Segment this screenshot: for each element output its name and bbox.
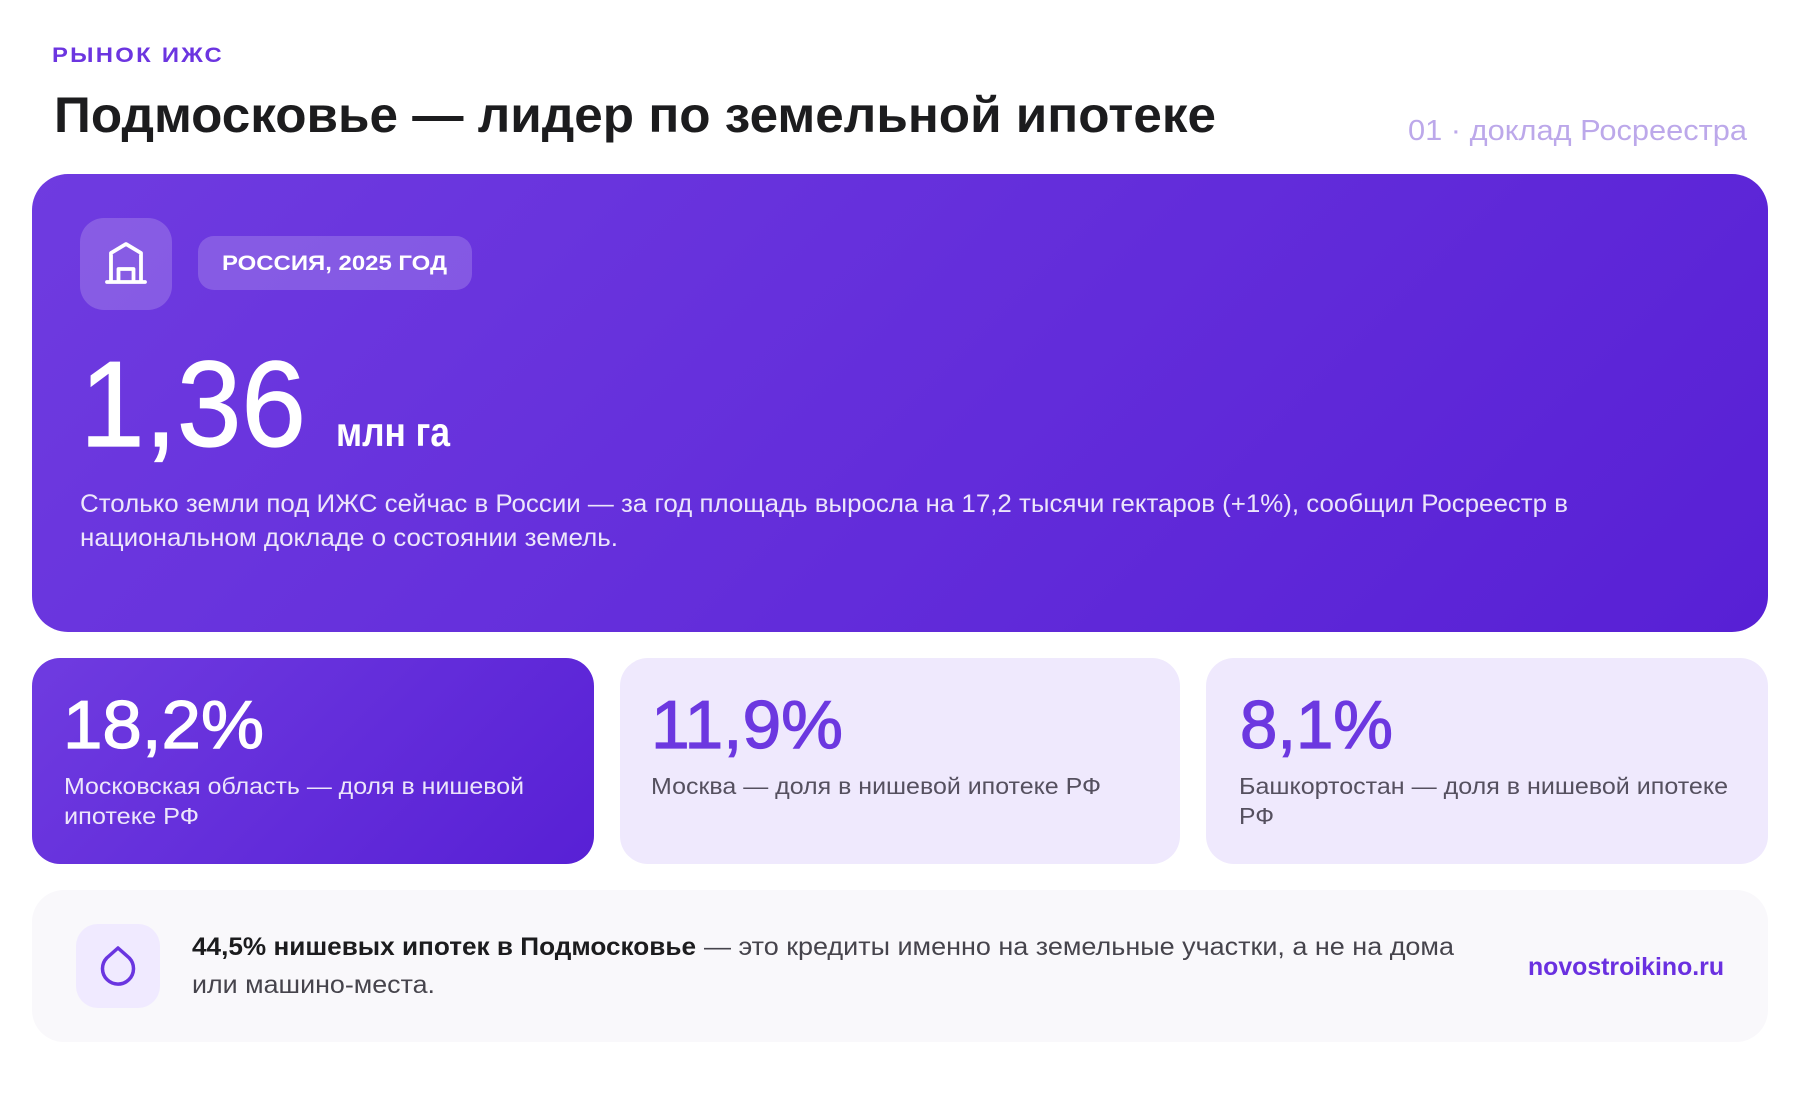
title: Подмосковье — лидер по земельной ипотеке — [54, 87, 1216, 143]
panel: bottom note — [32, 890, 1768, 1042]
description — [80, 490, 1568, 552]
panel: main stat hero — [32, 174, 1768, 632]
badge: Россия, 2025 год — [198, 236, 472, 290]
description: Столько земли под ИЖС сейчас в России — за год площадь выросла на 17,2 тысячи гектаров (+1%), сообщил Росреестр в — [80, 490, 1568, 518]
stat: 18,2%: 18,2% — [63, 687, 264, 763]
label — [64, 773, 524, 829]
note text: — это кредиты именно на земельные участки, а не на дома — [704, 933, 1454, 961]
page tag: 01 · доклад Росреестра — [1408, 115, 1748, 147]
label: РФ — [1239, 803, 1274, 829]
label — [1239, 773, 1728, 829]
panel: Москва — [620, 658, 1180, 864]
note text: 44,5% нишевых ипотек в Подмосковье — [192, 933, 696, 961]
panel: Башкортостан — [1206, 658, 1768, 864]
stat: 11,9%: 11,9% — [651, 687, 843, 763]
stat: 8,1%: 8,1% — [1240, 687, 1393, 763]
note text — [192, 933, 1454, 999]
icon: drop — [76, 924, 160, 1008]
label: Башкортостан — доля в нишевой ипотеке — [1239, 773, 1728, 799]
label: Москва — доля в нишевой ипотеке РФ — [651, 773, 1101, 799]
source link: novostroikino.ru — [1528, 953, 1724, 981]
label: ипотеке РФ — [64, 803, 199, 829]
big number: 1,36 — [80, 336, 306, 472]
eyebrow: рынок ИЖС: РЫНОК ИЖС — [52, 44, 224, 67]
label: Московская область — доля в нишевой — [64, 773, 524, 799]
icon: house — [80, 218, 172, 310]
panel: Московская область — [32, 658, 594, 864]
description: национальном докладе о состоянии земель. — [80, 524, 618, 552]
note text: или машино-места. — [192, 971, 435, 999]
unit: млн га — [336, 409, 451, 455]
badge: Россия, 2025 год: РОССИЯ, 2025 ГОД — [222, 252, 447, 275]
